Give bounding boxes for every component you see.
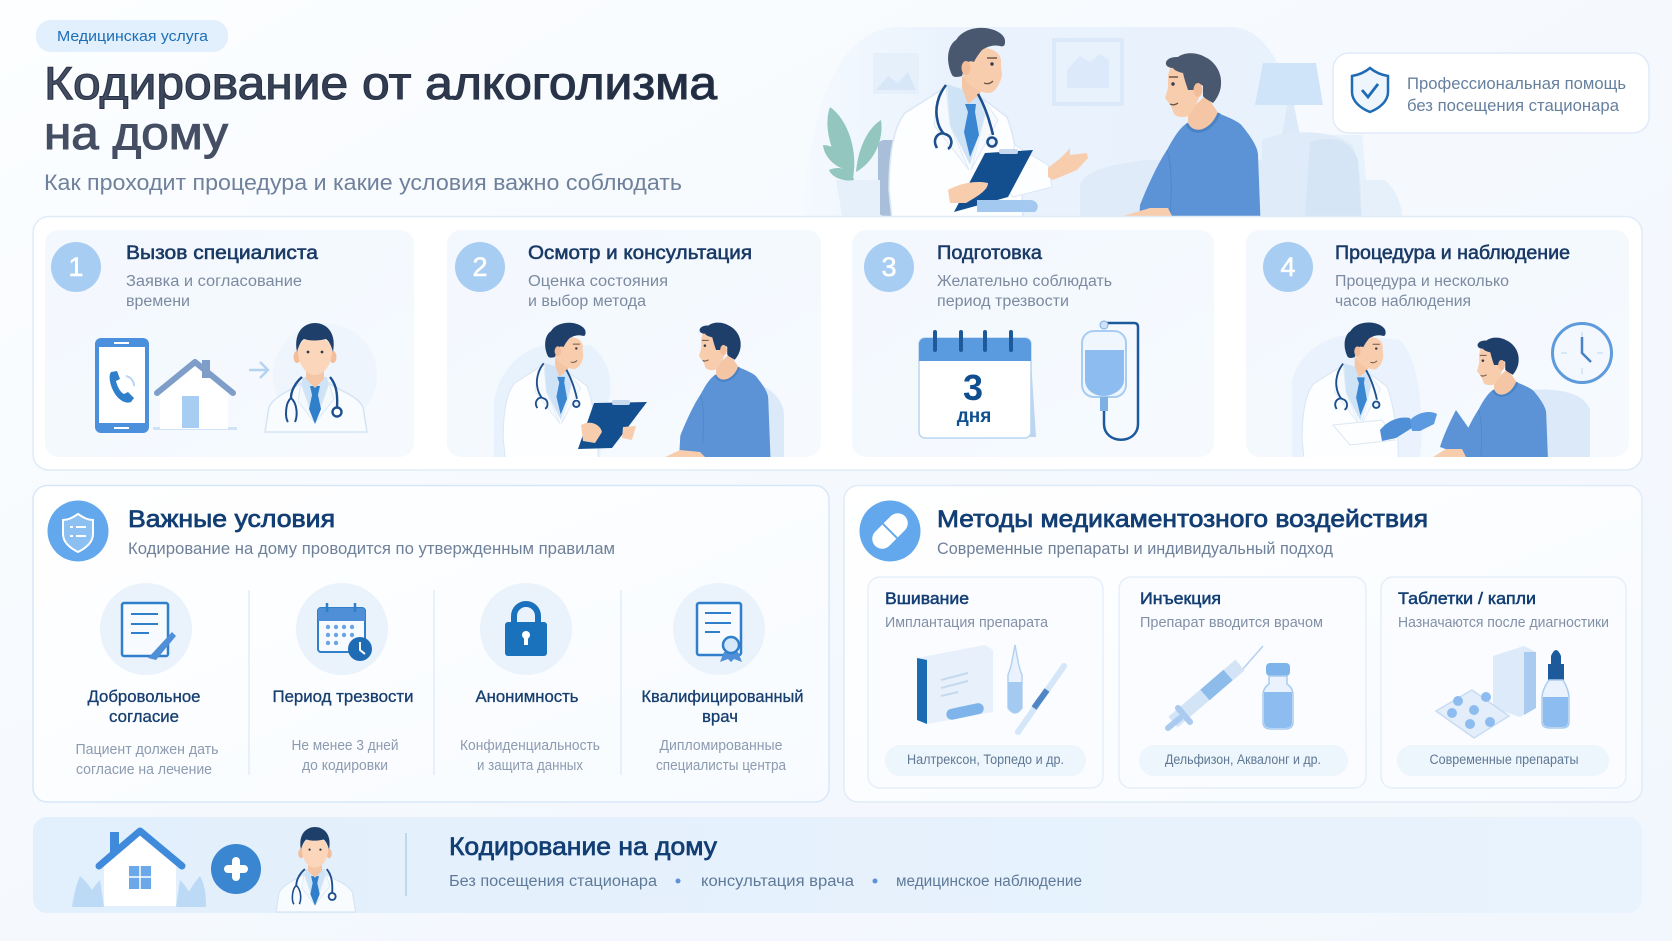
panel: important conditions: Кодирование на дому проводится по утвержденным правилам	[128, 540, 615, 558]
title: на дому	[44, 107, 228, 159]
subtitle: Как проходит процедура и какие условия важно соблюдать	[44, 170, 682, 195]
step 2: examination and consultation: и выбор метода	[528, 293, 646, 310]
condition: qualified doctor: Квалифицированный	[642, 688, 804, 706]
method: injection: Препарат вводится врачом	[1140, 615, 1323, 631]
title	[44, 57, 717, 159]
step 2: examination and consultation: Осмотр и консультация	[528, 243, 752, 264]
icon: box, ampoule, implant tool	[917, 645, 1064, 732]
step 3: preparation	[852, 230, 1214, 457]
condition: anonymity: Анонимность	[476, 688, 578, 706]
arrow	[249, 362, 268, 378]
step 2: examination and consultation	[447, 230, 821, 457]
icon: shield list	[48, 500, 108, 562]
step 4: procedure and observation: 4	[1280, 252, 1296, 282]
hero illustration: doctor and patient at home	[803, 27, 1402, 260]
icon: house with plants	[72, 831, 206, 907]
step 3: preparation: 3	[881, 252, 897, 282]
callout: professional help: без посещения стационара	[1407, 97, 1620, 115]
illustration: doctor and patient	[494, 322, 784, 457]
panel: important conditions	[33, 486, 829, 802]
method: implant	[868, 577, 1103, 788]
panel: steps	[33, 216, 1642, 492]
panel: medication methods: Методы медикаментозного воздействия	[937, 506, 1428, 533]
step 1: specialist call: 1	[68, 252, 84, 282]
panel: important conditions: Важные условия	[128, 506, 335, 533]
icon: calendar 3 days: 3	[963, 367, 983, 408]
condition: qualified doctor: врач	[702, 708, 738, 726]
condition: anonymity: и защита данных	[477, 758, 584, 774]
icon: calendar 3 days: дня	[957, 406, 991, 427]
icon: shield check	[1352, 68, 1388, 112]
banner: coding at home	[33, 817, 1642, 913]
step 4: procedure and observation	[1246, 230, 1629, 457]
method: injection: Инъекция	[1140, 589, 1221, 608]
method: tablets and drops: Современные препараты	[1430, 752, 1578, 767]
badge: medical service	[36, 20, 228, 52]
banner text	[449, 873, 1082, 890]
doctor bust	[265, 323, 377, 432]
condition: anonymity	[460, 583, 600, 774]
step 1: specialist call	[45, 230, 414, 457]
condition: voluntary consent: согласие	[109, 708, 179, 726]
icon: calendar 3 days	[919, 332, 1036, 438]
method: tablets and drops: Назначаются после диагностики	[1398, 615, 1609, 631]
step 4: procedure and observation: Процедура и наблюдение	[1335, 243, 1570, 264]
step 1: specialist call: Вызов специалиста	[126, 243, 318, 264]
icon: IV drip	[1082, 321, 1138, 440]
panel: medication methods: Современные препараты и индивидуальный подход	[937, 540, 1333, 558]
icon: blister, box and dropper	[1436, 646, 1569, 738]
step 1: specialist call: Заявка и согласование	[126, 273, 302, 290]
condition: voluntary consent	[76, 583, 218, 778]
condition: qualified doctor	[642, 583, 804, 774]
icon: phone	[95, 338, 149, 433]
step 2: examination and consultation: 2	[472, 252, 488, 282]
banner text: консультация врача	[701, 873, 854, 890]
banner heading: Кодирование на дому	[449, 833, 718, 861]
method: implant: Налтрексон, Торпедо и др.	[907, 752, 1064, 767]
method: implant: Вшивание	[885, 589, 969, 608]
method: tablets and drops: Таблетки / капли	[1398, 589, 1536, 608]
condition: qualified doctor: специалисты центра	[656, 758, 787, 774]
condition: sobriety period: Период трезвости	[272, 688, 414, 706]
banner text: Без посещения стационара	[449, 873, 657, 890]
condition: voluntary consent: Добровольное	[88, 688, 200, 706]
callout: professional help: Профессиональная помощь	[1407, 75, 1626, 93]
step 1: specialist call: времени	[126, 293, 190, 310]
doctor bust	[276, 827, 356, 912]
step 3: preparation: Подготовка	[937, 243, 1042, 264]
condition: sobriety period	[272, 583, 414, 774]
condition: voluntary consent: Пациент должен дать	[76, 742, 218, 758]
step 2: examination and consultation: Оценка состояния	[528, 273, 668, 290]
icon: plus	[211, 844, 261, 894]
method: injection	[1119, 577, 1366, 788]
title: Кодирование от алкоголизма	[44, 57, 717, 109]
condition: sobriety period: до кодировки	[302, 758, 388, 774]
callout: professional help	[1333, 53, 1649, 133]
method: implant: Имплантация препарата	[885, 615, 1049, 631]
banner text: медицинское наблюдение	[896, 873, 1082, 890]
condition: qualified doctor: Дипломированные	[660, 738, 782, 754]
step 3: preparation: Желательно соблюдать	[937, 273, 1112, 290]
badge: medical service: Медицинская услуга	[57, 28, 209, 45]
condition: sobriety period: Не менее 3 дней	[292, 738, 398, 754]
icon: clock	[1552, 324, 1612, 382]
condition: voluntary consent: согласие на лечение	[76, 762, 212, 778]
method: tablets and drops	[1381, 577, 1626, 788]
method: injection: Дельфизон, Аквалонг и др.	[1165, 752, 1321, 767]
step 4: procedure and observation: Процедура и несколько	[1335, 273, 1509, 290]
icon: syringe and vial	[1168, 646, 1293, 729]
panel: medication methods	[844, 486, 1642, 802]
illustration: doctor with gloves and patient	[1292, 322, 1590, 457]
step 4: procedure and observation: часов наблюдения	[1335, 293, 1471, 310]
icon: pill	[860, 500, 920, 562]
step 3: preparation: период трезвости	[937, 293, 1069, 310]
icon: house	[153, 360, 237, 430]
condition: anonymity: Конфиденциальность	[460, 738, 600, 754]
